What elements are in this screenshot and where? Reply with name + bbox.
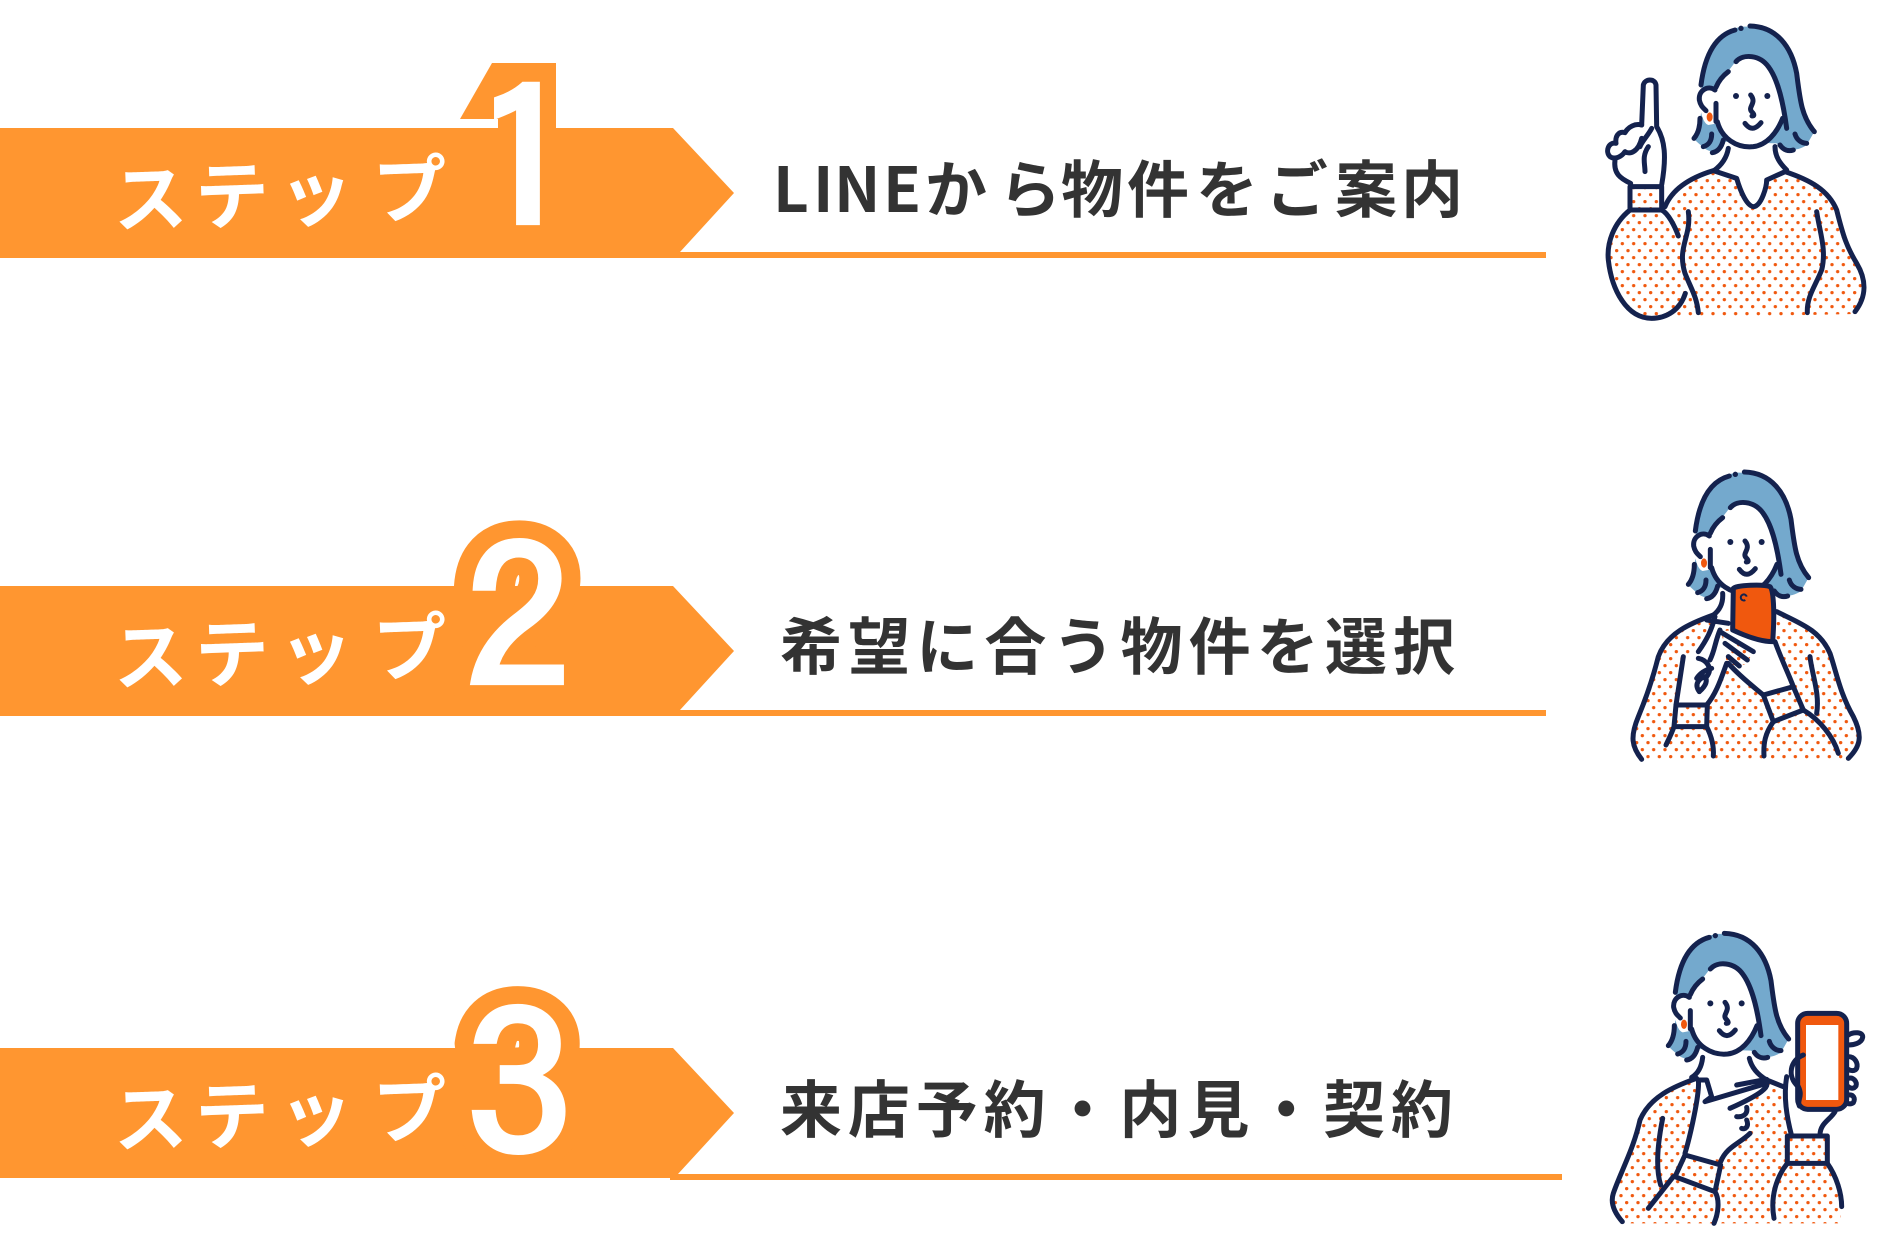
- step number 2: 2: [465, 520, 571, 716]
- step number 1: 1: [472, 60, 578, 256]
- step label: ステップ: [111, 1050, 449, 1169]
- banner arrow and underline: [0, 586, 1546, 716]
- banner arrow and underline: [0, 1048, 1562, 1180]
- step 3 heading: 来店予約・内見・契約: [780, 1060, 1453, 1150]
- arm and hand fill: [1685, 1055, 1770, 1160]
- number 1 backing shape: [460, 63, 556, 130]
- step 1 banner: [0, 60, 1546, 258]
- step label: ステップ: [111, 130, 449, 249]
- banner arrow and underline: [0, 128, 1546, 258]
- neck and hand fill: [1714, 145, 1785, 207]
- step 1 heading: LINEから物件をご案内: [773, 140, 1463, 230]
- illustration: woman looking at phone: [1633, 472, 1859, 759]
- step number 3: 3: [466, 986, 572, 1182]
- body with dot pattern: [1612, 1078, 1842, 1223]
- body with dot pattern: [1633, 612, 1859, 759]
- phone: [1733, 585, 1774, 642]
- step 3 banner: [0, 986, 1562, 1182]
- step 2 banner: [0, 520, 1546, 716]
- phone: [1798, 1013, 1847, 1109]
- illustration: woman pointing up: [1608, 26, 1864, 318]
- illustration: woman showing phone: [1612, 933, 1863, 1223]
- step 2 heading: 希望に合う物件を選択: [780, 597, 1455, 687]
- arm and hand fill: [1677, 588, 1793, 705]
- body with dot pattern: [1608, 171, 1864, 318]
- step label: ステップ: [111, 588, 449, 707]
